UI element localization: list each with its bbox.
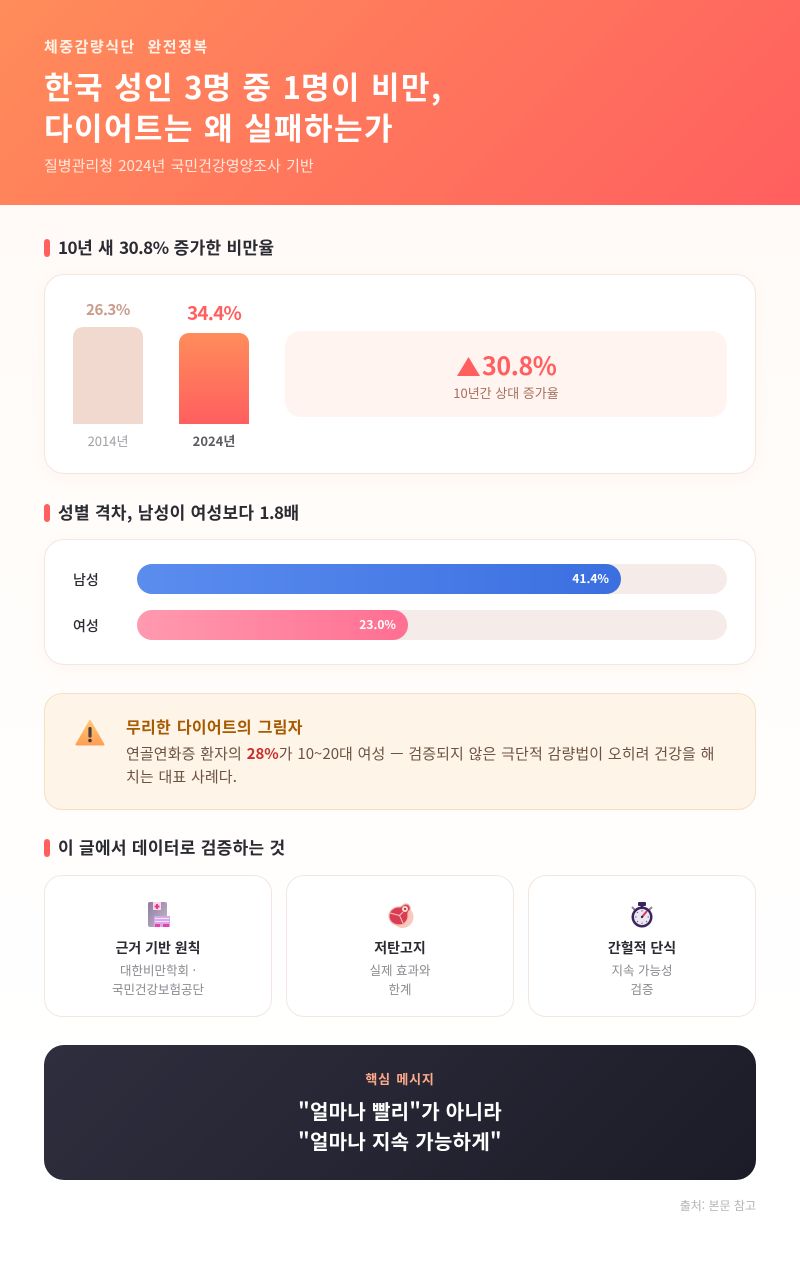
value female: 23.0%	[359, 616, 396, 633]
card description: 대한비만학회 ·	[120, 960, 196, 979]
bar 2014	[73, 327, 143, 424]
main title	[44, 63, 441, 149]
card description	[369, 960, 430, 998]
card description	[112, 960, 204, 998]
label 2014: 2014년	[88, 431, 128, 450]
increase number: 30.8%	[482, 347, 556, 383]
card description: 국민건강보험공단	[112, 979, 204, 998]
card description: 지속 가능성	[611, 960, 672, 979]
main title: 한국 성인 3명 중 1명이 비만,	[44, 63, 441, 108]
subtitle: 질병관리청 2024년 국민건강영양조사 기반	[44, 155, 314, 176]
card description	[611, 960, 672, 998]
increase value	[457, 347, 556, 383]
bar female	[137, 610, 408, 640]
source note: 출처: 본문 참고	[680, 1197, 756, 1214]
track male	[137, 564, 727, 594]
card: evidence principles	[44, 875, 272, 1017]
heading: what this article verifies: 이 글에서 데이터로 검증하는 것	[58, 834, 285, 859]
key message text	[298, 1096, 502, 1155]
card description: 검증	[630, 979, 654, 998]
icon: warning	[76, 720, 104, 746]
label male: 남성	[73, 570, 99, 590]
value male: 41.4%	[572, 570, 609, 587]
panel: gender gap	[44, 539, 756, 665]
card title: 간헐적 단식	[608, 938, 676, 958]
card title: 저탄고지	[374, 938, 426, 958]
panel: warning callout	[44, 693, 756, 810]
icon: hospital document	[148, 902, 170, 927]
warning title: 무리한 다이어트의 그림자	[126, 714, 303, 738]
card description: 한계	[388, 979, 412, 998]
key message text: "얼마나 빨리"가 아니라	[298, 1096, 502, 1125]
icon: stopwatch	[631, 902, 653, 928]
bar 2024	[179, 333, 249, 424]
key message label: 핵심 메시지	[365, 1069, 435, 1088]
label 2024: 2024년	[193, 431, 235, 450]
value 2024: 34.4%	[187, 299, 241, 326]
panel: obesity rate comparison	[44, 274, 756, 474]
card description: 실제 효과와	[369, 960, 430, 979]
track female	[137, 610, 727, 640]
main title: 다이어트는 왜 실패하는가	[44, 104, 394, 149]
warning body	[126, 743, 715, 787]
bar male	[137, 564, 621, 594]
icon: meat	[388, 903, 414, 928]
heading: gender gap: 성별 격차, 남성이 여성보다 1.8배	[58, 499, 299, 524]
panel: key message	[44, 1045, 756, 1180]
callout: relative increase	[285, 331, 727, 417]
header banner	[0, 0, 800, 205]
key message text: "얼마나 지속 가능하게"	[298, 1126, 502, 1155]
card: intermittent fasting	[528, 875, 756, 1017]
icon: up triangle	[457, 357, 480, 376]
value 2014: 26.3%	[86, 299, 130, 320]
warning body: 연골연화증 환자의 28%가 10~20대 여성 — 검증되지 않은 극단적 감량법이 오히려 건강을 해	[126, 743, 715, 764]
increase caption: 10년간 상대 증가율	[453, 383, 559, 402]
eyebrow label: 체중감량식단 완전정복	[44, 36, 209, 57]
heading: obesity rate: 10년 새 30.8% 증가한 비만율	[58, 234, 274, 259]
label female: 여성	[73, 616, 99, 636]
warning body: 치는 대표 사례다.	[126, 766, 237, 787]
card title: 근거 기반 원칙	[115, 938, 201, 958]
card: low-carb high-fat	[286, 875, 514, 1017]
